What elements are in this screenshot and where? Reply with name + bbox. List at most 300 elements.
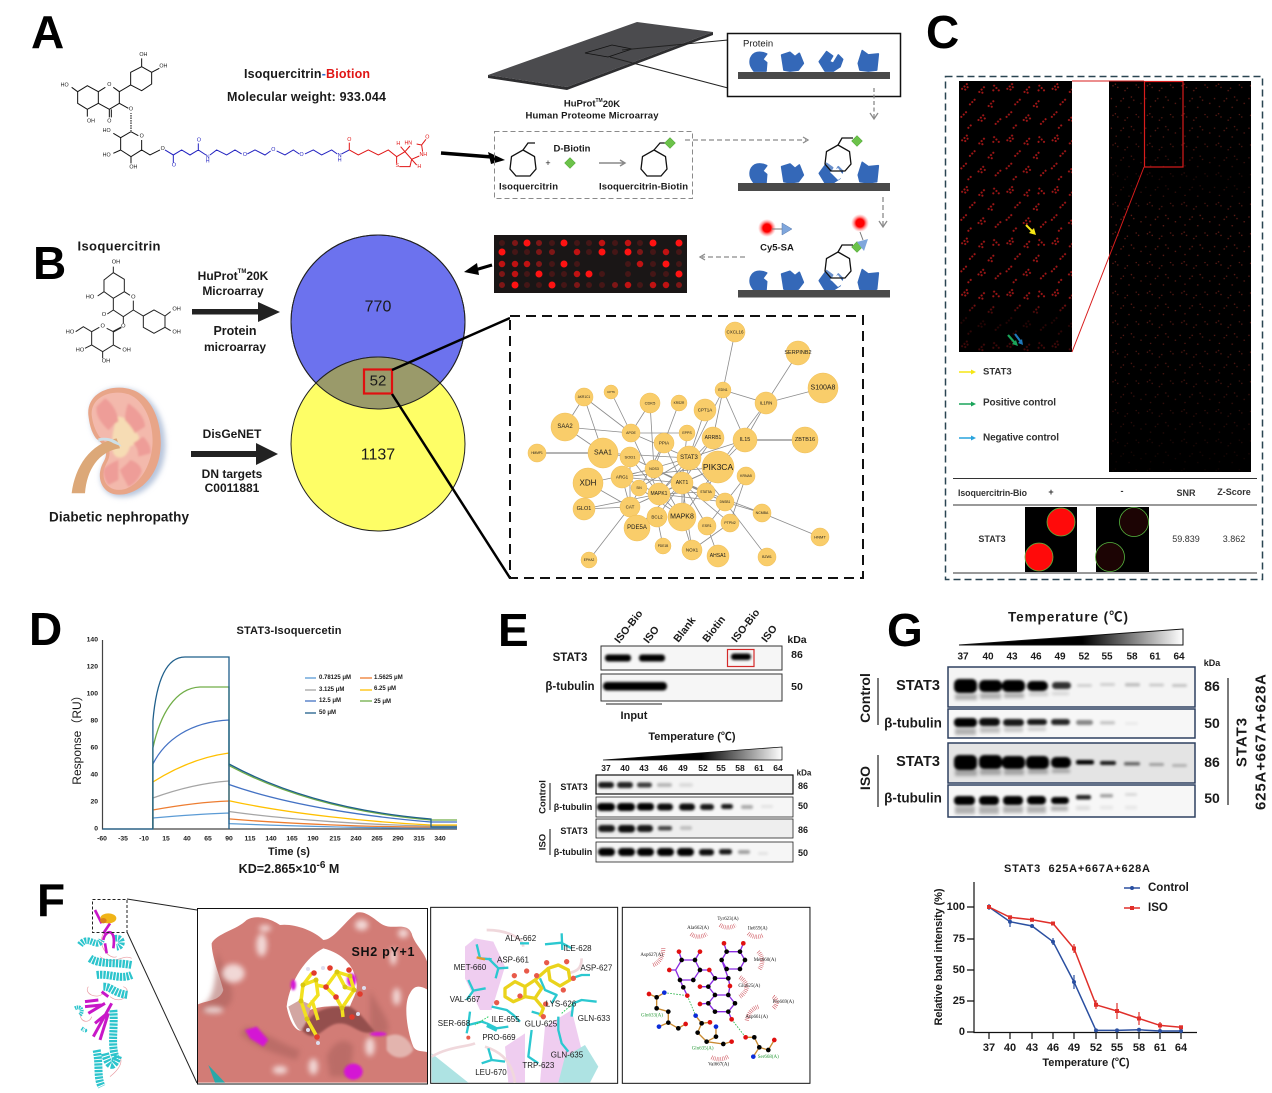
thermal stability line chart: 43 (1026, 1042, 1038, 1054)
network panel: SERPINB2 (784, 350, 812, 356)
pulldown kDa labels: kDa (787, 634, 807, 646)
x axis title: Time (s) (268, 846, 310, 858)
legend: Negative control (983, 432, 1059, 444)
chart title: STAT3-Isoquercetin (236, 625, 342, 637)
2D interaction diagram: Asp661(A) (745, 1015, 768, 1020)
concentration legend: 0.78125 μM (319, 675, 351, 681)
temperature wedge: 40 (982, 652, 994, 662)
2D interaction diagram: Gln633(A) (641, 1013, 663, 1018)
chemical structure: isoquercitrin-biotin: H (338, 158, 342, 164)
chemical structure: isoquercitrin: O (121, 323, 126, 329)
ligand ball and stick (298, 965, 366, 1045)
thermal stability line chart: 49 (1068, 1042, 1080, 1054)
pulldown lane labels: Biotin (700, 614, 728, 645)
SPR sensorgram: 290 (392, 836, 404, 842)
thermal stability line chart: 25 (953, 995, 965, 1007)
binding step (738, 136, 890, 191)
pulldown STAT3 blot: STAT3 (553, 652, 587, 664)
2D interaction diagram: Ser668(A) (758, 1055, 779, 1060)
compound name: Isoquercitrin-Biotion (244, 67, 370, 81)
panel E (498, 604, 812, 862)
concentration legend: 12.5 μM (319, 698, 341, 704)
results table (953, 478, 1257, 573)
SPR sensorgram: 65 (204, 836, 212, 842)
network panel: PIK3CA (703, 462, 733, 472)
pulldown kDa labels (787, 634, 807, 693)
arrow from array image to Venn (464, 263, 492, 275)
temperature wedge: 43 (1006, 652, 1018, 662)
network panel: EPHA2 (584, 558, 594, 562)
network panel: STAT3 (680, 455, 699, 461)
SPR sensorgram: 115 (245, 836, 256, 842)
network panel: S100A8 (811, 384, 836, 392)
microarray arrow with labels: HuProt (198, 269, 238, 283)
chemical structure: isoquercitrin: OH (122, 348, 131, 354)
chemical structure: isoquercitrin-biotin: O (243, 152, 247, 158)
3D interaction residues panel: ILE-628 (564, 944, 592, 953)
temperature wedge: kDa (1204, 658, 1221, 668)
concentration legend: 50 μM (319, 710, 336, 716)
protein inset box: Protein (743, 38, 773, 50)
DisGeNET arrow with labels: DN targets (202, 467, 263, 481)
CETSA blots: STAT3 (560, 782, 588, 792)
results table: STAT3 (978, 534, 1006, 544)
mutant CETSA blots: 86 (1204, 754, 1220, 770)
dashed arrow to array image (700, 254, 745, 260)
thermal stability line chart: 46 (1047, 1042, 1059, 1054)
network panel: XDH (580, 478, 597, 488)
chemical structure: isoquercitrin-biotin: O (300, 152, 304, 158)
network panel: CDK5 (645, 400, 656, 406)
chemical structure: isoquercitrin-biotin: S (396, 163, 400, 169)
chemical structure: isoquercitrin-biotin: O (161, 146, 165, 152)
temperature wedge: 46 (1030, 652, 1042, 662)
STAT3 arrow on scan (1026, 225, 1036, 235)
chemical structure: isoquercitrin: O (100, 323, 105, 329)
chemical structure: isoquercitrin-biotin: O (425, 135, 429, 141)
labelling reaction box: Isoquercitrin-Biotin (599, 182, 688, 192)
pulldown lane labels: ISO (759, 623, 780, 645)
selection box and zoom lines (92, 899, 197, 1083)
microarray arrow with labels: microarray (204, 340, 266, 354)
control arrows on scan (1008, 334, 1023, 346)
2D interaction diagram: Val667(A) (708, 1062, 729, 1067)
protein ribbon overview (75, 910, 132, 1087)
microarray name: HuProt (564, 98, 596, 110)
panel letter G: G (887, 604, 923, 656)
3D interaction residues panel: ILE-655 (492, 1015, 520, 1024)
2D interaction diagram: Ile659(A) (748, 926, 768, 931)
microarray arrow with labels: TM (238, 269, 246, 275)
thermal stability line chart: 58 (1133, 1042, 1145, 1054)
thermal stability line chart: 50 (953, 964, 965, 976)
CETSA temperature wedge (601, 731, 812, 778)
chemical structure: isoquercitrin: OH (102, 359, 110, 365)
temperature wedge (957, 610, 1221, 668)
CETSA temperature wedge: kDa (797, 768, 812, 778)
chemical structure: isoquercitrin-biotin: H (206, 158, 210, 164)
CETSA temperature wedge: 40 (620, 763, 630, 773)
2D interaction diagram: Pro669(A) (773, 1000, 794, 1005)
y axis title: Response（RU） (70, 689, 84, 785)
SPR sensorgram: 40 (90, 772, 98, 778)
microarray arrow with labels (192, 269, 280, 354)
Venn diagram: 770 (365, 298, 391, 316)
chemical structure: isoquercitrin (66, 259, 181, 365)
chemical structure: isoquercitrin-biotin: H (396, 141, 400, 147)
SPR sensorgram (87, 636, 457, 842)
2D interaction diagram: Glu625(A) (738, 984, 761, 989)
isoquercitrin label: Isoquercitrin (78, 238, 161, 254)
pulldown lane labels: ISO-Bio (612, 608, 645, 646)
SPR sensorgram: 100 (87, 690, 98, 698)
temperature wedge: 52 (1078, 652, 1090, 662)
3D interaction residues panel: PRO-669 (482, 1033, 516, 1042)
legend (959, 366, 1059, 444)
thermal stability line chart: 100 (947, 901, 965, 913)
SPR sensorgram: 15 (162, 836, 170, 842)
mutant CETSA blots: β-tubulin (884, 790, 942, 806)
CETSA blots: 50 (798, 801, 808, 811)
mutant CETSA blots: STAT3 (896, 754, 940, 770)
thermal stability line chart: 61 (1154, 1042, 1166, 1054)
network panel: CXCL16 (726, 330, 744, 334)
labelling reaction box: Isoquercitrin (499, 182, 558, 192)
network panel: AHSA1 (710, 553, 726, 559)
SPR sensorgram: 315 (413, 836, 425, 842)
KD value: M (325, 862, 339, 876)
temperature wedge: 37 (957, 652, 969, 662)
dashed arrow to binding step (685, 137, 808, 143)
3D interaction residues panel: SER-668 (438, 1019, 471, 1028)
chart legend: ISO (1148, 902, 1168, 914)
network panel: CPT1A (698, 408, 712, 412)
zoom lines to network (392, 318, 510, 578)
network panel: PTPN2 (724, 521, 736, 525)
CETSA temperature wedge: 64 (773, 763, 783, 773)
2D interaction diagram: Met660(A) (754, 958, 777, 963)
SPR sensorgram: -10 (139, 836, 149, 842)
network panel (510, 316, 863, 578)
network panel: BCL2 (651, 514, 663, 520)
SPR sensorgram: 60 (90, 744, 98, 752)
temperature wedge: 49 (1054, 652, 1066, 662)
CETSA temperature wedge: 37 (601, 763, 611, 773)
3D interaction residues panel: ALA-662 (505, 934, 537, 943)
results table: + (1048, 487, 1054, 497)
3D interaction residues panel: ASP-627 (580, 963, 613, 972)
KD value: -6 (317, 860, 326, 870)
panel B (33, 235, 863, 578)
SPR sensorgram: 0 (94, 826, 98, 832)
panel A (31, 6, 900, 298)
thermal stability line chart: 55 (1111, 1042, 1123, 1054)
panel letter B: B (33, 237, 66, 289)
network panel: ARRB1 (705, 435, 722, 441)
chemical structure: isoquercitrin-biotin: O (271, 147, 275, 153)
network panel: ZBTB16 (795, 437, 815, 443)
chemical structure: isoquercitrin-biotin: O (107, 119, 111, 125)
concentration legend: 25 μM (374, 699, 391, 705)
3D interaction residues panel: GLU-625 (525, 1019, 558, 1028)
network panel: NCMBA (756, 511, 769, 515)
thermal stability line chart: 52 (1090, 1042, 1102, 1054)
labelling reaction box (494, 132, 692, 198)
pulldown tubulin blot: β-tubulin (545, 681, 595, 693)
pulldown lane labels: ISO-Bio (729, 607, 762, 645)
DisGeNET arrow with labels (191, 427, 278, 495)
network panel: SAA2 (557, 424, 573, 430)
3D interaction residues panel: LEU-670 (475, 1068, 507, 1077)
thermal stability line chart: 37 (983, 1042, 995, 1054)
concentration legend (305, 675, 403, 716)
thermal stability line chart: 40 (1004, 1042, 1016, 1054)
network panel: BZW1 (762, 555, 772, 559)
chemical structure: isoquercitrin-biotin: O (129, 106, 133, 112)
network panel: HMMP1 (531, 451, 543, 455)
chemical structure: isoquercitrin-biotin: N (338, 153, 342, 159)
group labels: Control (857, 673, 873, 723)
chemical structure: isoquercitrin: O (131, 295, 136, 301)
network panel: EDN1 (718, 388, 728, 392)
chemical structure: isoquercitrin: OH (172, 306, 181, 312)
Cy5-SA probe (758, 219, 794, 254)
panel letter D: D (29, 603, 62, 655)
legend: Positive control (983, 398, 1056, 408)
chemical structure: isoquercitrin: OH (172, 329, 181, 335)
kidney caption: Diabetic nephropathy (49, 510, 189, 524)
chemical structure: isoquercitrin: HO (86, 295, 95, 301)
CETSA blots: β-tubulin (554, 802, 592, 812)
microarray name: TM (596, 98, 603, 104)
SPR sensorgram: 80 (90, 718, 98, 724)
chemical structure: isoquercitrin-biotin: O (140, 134, 144, 140)
SPR sensorgram: 165 (286, 836, 298, 842)
whole microarray scan (1109, 81, 1251, 472)
chemical structure: isoquercitrin-biotin: OH (129, 164, 137, 170)
detection step (738, 214, 890, 298)
chemical structure: isoquercitrin: HO (66, 329, 75, 335)
group labels: ISO (857, 766, 873, 790)
labelling reaction box: D-Biotin (554, 144, 591, 154)
3D interaction residues panel: GLN-633 (578, 1014, 611, 1023)
network panel: HNMT (814, 534, 826, 540)
binding pocket surface view (197, 908, 428, 1084)
fluorescent array image (494, 235, 687, 293)
CETSA blots: 86 (798, 825, 808, 835)
microarray name: 20K (603, 98, 620, 110)
Venn diagram (291, 235, 465, 531)
3D interaction residues panel: VAL-667 (450, 995, 481, 1004)
panel F (37, 874, 810, 1087)
CETSA temperature wedge: 52 (698, 763, 708, 773)
2D interaction diagram: Tyr623(A) (717, 917, 739, 922)
Cy5-SA probe: Cy5-SA (760, 242, 794, 254)
group labels: 625A+667A+628A (1252, 674, 1270, 810)
chart title: STAT3 625A+667A+628A (1004, 863, 1150, 875)
kidney illustration (72, 388, 165, 497)
chemical structure: isoquercitrin-biotin: OH (87, 119, 95, 125)
network panel: AKT1 (676, 480, 688, 486)
network panel: MAPK8 (670, 514, 694, 520)
arrow to reaction box (441, 152, 505, 164)
chart legend (1124, 882, 1189, 914)
overlap count callout (364, 370, 392, 394)
mutant CETSA blots: 50 (1204, 715, 1220, 731)
mutant CETSA blots: STAT3 (896, 678, 940, 694)
microarray arrow with labels: Microarray (202, 284, 264, 298)
zoomed microarray scan (959, 81, 1072, 352)
panel D (29, 603, 457, 876)
chemical structure: isoquercitrin-biotin: H (417, 164, 421, 170)
pulldown lane labels: ISO (641, 624, 662, 646)
dashed frame (946, 76, 1262, 580)
network panel: AKR1C1 (578, 395, 590, 399)
molecular weight: Molecular weight: 933.044 (227, 90, 386, 104)
DisGeNET arrow with labels: C0011881 (205, 481, 260, 495)
microarray arrow with labels: Protein (213, 324, 257, 338)
SPR sensorgram: 190 (307, 836, 319, 842)
chemical structure: isoquercitrin-biotin: O (347, 137, 351, 143)
panel G (857, 604, 1270, 1069)
2D interaction diagram (622, 907, 810, 1083)
chemical structure: isoquercitrin-biotin: NH (419, 152, 427, 158)
pulldown lane labels: Blank (671, 615, 698, 645)
CETSA temperature wedge: 55 (716, 763, 726, 773)
network panel: DNSB1 (720, 500, 731, 504)
mutant CETSA blots: β-tubulin (884, 716, 942, 730)
network panel: PDE5A (627, 525, 647, 531)
SPR sensorgram: 340 (434, 836, 446, 842)
CETSA temperature wedge: Temperature (℃) (648, 731, 736, 743)
temperature wedge: 58 (1126, 652, 1138, 662)
CETSA blots: ISO (538, 834, 548, 850)
network panel: IL1RN (760, 400, 772, 406)
SPR sensorgram: 215 (329, 836, 341, 842)
CETSA blots: 86 (798, 781, 808, 791)
chemical structure: isoquercitrin-biotin: OH (159, 64, 167, 70)
SPR sensorgram: -60 (97, 836, 107, 842)
3D interaction residues panel: ASP-661 (497, 955, 530, 964)
panel letter F: F (37, 874, 65, 926)
red selection box and zoom lines (1072, 81, 1183, 352)
SPR sensorgram: 140 (87, 636, 98, 644)
CETSA temperature wedge: 61 (754, 763, 764, 773)
network panel: SOD1 (625, 454, 636, 460)
Venn diagram: 1137 (361, 446, 395, 464)
overlap count callout: 52 (370, 372, 386, 390)
3D interaction residues panel (431, 907, 618, 1083)
x axis title: Temperature (℃) (1042, 1057, 1130, 1069)
concentration legend: 1.5625 μM (374, 675, 403, 681)
network panel: ARG1 (616, 474, 629, 480)
arrow down 1 (870, 88, 878, 119)
chemical structure: isoquercitrin-biotin: O (107, 82, 111, 88)
network panel: GLO1 (577, 506, 591, 512)
concentration legend: 6.25 μM (374, 686, 396, 692)
SPR sensorgram: -35 (118, 836, 128, 842)
temperature wedge: 61 (1149, 652, 1161, 662)
pulldown tubulin blot (545, 674, 782, 701)
group labels: STAT3 (1234, 717, 1250, 767)
SPR sensorgram: 20 (90, 798, 98, 806)
network panel: CAT (626, 504, 635, 510)
network panel: PDE1B (658, 544, 668, 548)
SPR sensorgram: 90 (225, 836, 233, 842)
chemical structure: isoquercitrin-biotin: O (197, 138, 201, 144)
chemical structure: isoquercitrin-biotin (61, 52, 429, 170)
legend: STAT3 (983, 366, 1012, 378)
3D interaction residues panel: TRP-623 (522, 1061, 555, 1070)
panel letter A: A (31, 6, 64, 58)
network panel: IL15 (740, 437, 750, 443)
DisGeNET arrow with labels: DisGeNET (203, 427, 262, 441)
pocket label: SH2 pY+1 (352, 945, 415, 959)
microarray arrow with labels: 20K (246, 269, 269, 283)
KD value: KD=2.865×10 (239, 862, 317, 876)
thermal stability line chart (947, 882, 1197, 1054)
thermal stability line chart: 75 (953, 933, 965, 945)
network panel: APOE (626, 431, 637, 435)
chemical structure: isoquercitrin-biotin: HO (103, 128, 111, 134)
3D interaction residues panel: LYS-626 (546, 999, 577, 1008)
network panel: NOX1 (686, 548, 699, 552)
SPR sensorgram: 40 (183, 836, 191, 842)
results table: 3.862 (1223, 534, 1245, 544)
chemical structure: isoquercitrin: O (102, 312, 107, 318)
network panel: KRNA5 (740, 474, 752, 478)
mutant CETSA blots: 50 (1204, 790, 1220, 806)
2D interaction diagram: Gln635(A) (692, 1046, 714, 1051)
network panel: PPIA (659, 440, 669, 446)
panel letter C: C (926, 6, 959, 58)
microarray name: Human Proteome Microarray (526, 110, 659, 122)
labelling reaction box: + (545, 158, 551, 168)
pulldown STAT3 blot (553, 646, 782, 670)
mutant CETSA blots: 86 (1204, 678, 1220, 694)
2D interaction diagram: Ala662(A) (687, 926, 709, 931)
chemical structure: isoquercitrin-biotin: HO (61, 82, 69, 88)
CETSA temperature wedge: 43 (639, 763, 649, 773)
results table: 59.839 (1172, 534, 1200, 544)
SPR sensorgram: 240 (350, 836, 362, 842)
network panel: MAPK1 (651, 491, 668, 497)
input bracket: Input (621, 710, 648, 722)
group labels (857, 673, 1270, 810)
thermal stability line chart: 0 (959, 1026, 965, 1038)
pulldown kDa labels: 50 (791, 681, 803, 693)
CETSA blots: Control (538, 780, 548, 814)
chemical structure: isoquercitrin-biotin: HO (103, 152, 111, 158)
microarray name (526, 98, 659, 122)
results table: Isoquercitrin-Bio (958, 488, 1028, 498)
network panel: CPT6 (607, 390, 615, 394)
3D interaction residues panel: MET-660 (454, 963, 487, 972)
2D interaction diagram: Asp627(A) (640, 953, 663, 958)
CETSA blots: STAT3 (560, 826, 588, 836)
3D interaction residues panel: GLN-635 (551, 1050, 584, 1059)
panel C (926, 6, 1262, 580)
network panel: KRS2R (674, 401, 685, 405)
pulldown kDa labels: 86 (791, 649, 803, 661)
network panel: EPPS (682, 431, 692, 435)
network panel: SAA1 (594, 450, 612, 456)
results table: - (1120, 486, 1124, 496)
temperature wedge: 64 (1173, 652, 1185, 662)
temperature wedge: Temperature (℃) (1008, 610, 1128, 624)
pulldown lane labels (612, 607, 780, 646)
chart legend: Control (1148, 882, 1189, 894)
